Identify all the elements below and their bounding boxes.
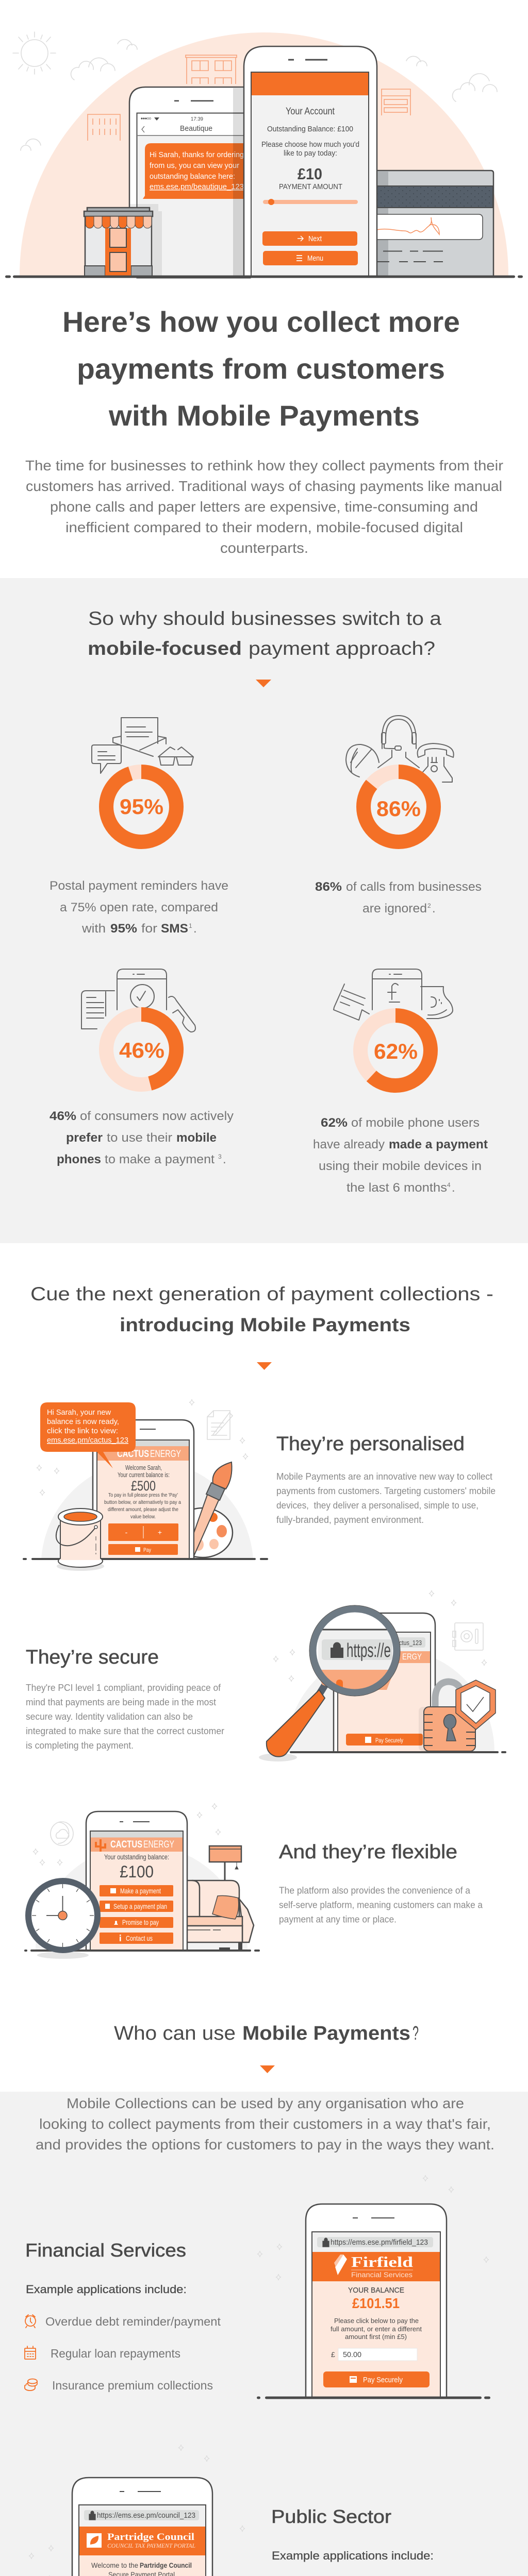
caption: 62%: 4 (447, 1181, 451, 1189)
phone: payment options (86, 1811, 187, 1951)
text: they're secure: integrated to make sure that the correct customer (26, 1725, 224, 1736)
heading: why switch: So why should businesses switch to a (88, 608, 441, 629)
donut: 46%: 46% (119, 1038, 164, 1062)
caption: 86%: 86% (315, 880, 342, 894)
caption: 62%: 62% (321, 1116, 348, 1130)
caption: 62%: made a payment (389, 1138, 488, 1151)
text: they're personalised (276, 1433, 496, 1525)
SMS phone (129, 87, 251, 278)
donut: 62%: 62% (374, 1039, 418, 1063)
caption: 46%: 3 (218, 1153, 222, 1160)
phone: secure payment: Pay Securely (375, 1737, 403, 1744)
caption: 46%: phones (57, 1153, 101, 1166)
payment phone: Please choose how much you'd (261, 140, 359, 149)
caption: 46%: to use their (107, 1131, 172, 1145)
illustration: secure (259, 1590, 506, 1761)
phone: partridge council: COUNCIL TAX PAYMENT PORTAL (107, 2542, 195, 2549)
phone: cactus balance: different amount, please adjust the (108, 1506, 178, 1513)
caption: 95%: with (81, 922, 106, 936)
arrow (257, 1362, 272, 1370)
phone: cactus balance: - (125, 1528, 128, 1536)
phone: cactus balance: Welcome Sarah, (125, 1464, 162, 1471)
padlock and shield (419, 1680, 496, 1751)
arrow (256, 680, 271, 687)
text: they're secure: They're PCI level 1 compliant, providing peace of (26, 1682, 221, 1693)
intro paragraph: phone calls and paper letters are expensive, time-consuming and (50, 499, 478, 515)
donut: 62% (360, 1015, 431, 1086)
donut: 86% (364, 772, 434, 842)
phone: firfield: £ (331, 2350, 335, 2359)
donut: 86%: 86% (376, 796, 421, 821)
icon: calendar (25, 2346, 36, 2359)
icon: phone, receipt and banknote (334, 969, 453, 1020)
caption: 46%: mobile (176, 1131, 217, 1145)
stat: 95% (50, 718, 228, 936)
bank card (371, 171, 493, 276)
phone: partridge council: Partridge Council (140, 2561, 192, 2569)
icon: letter, chat and glasses (92, 718, 193, 773)
text: they're secure: is completing the payment. (26, 1740, 134, 1751)
caption: 62%: . (452, 1181, 455, 1195)
phone: firfield: YOUR BALANCE (348, 2286, 404, 2295)
caption: 86%: 2 (427, 902, 431, 909)
phone: firfield: https://ems.ese.pm/firfield_123 (331, 2238, 428, 2247)
donut: 95%: 95% (120, 794, 163, 819)
phone: cactus balance: Pay (143, 1547, 151, 1553)
caption: 86%: are ignored (362, 902, 427, 916)
heading: who can use: ? (412, 2023, 419, 2044)
caption: 95%: 1 (189, 922, 192, 929)
SMS phone: Beautique (180, 124, 212, 133)
clouds (21, 40, 497, 150)
icon: moon and cloud (51, 1822, 73, 1845)
text: they're flexible: And they’re flexible (279, 1841, 457, 1863)
public sector text: Public Sector (271, 2506, 391, 2527)
financial services text: Financial Services (25, 2240, 186, 2261)
SMS bubble (143, 143, 248, 199)
stat: 86% (315, 716, 482, 916)
intro paragraph: inefficient compared to their modern, mobile-focused digital (65, 519, 463, 535)
heading: why switch: mobile-focused (88, 638, 242, 659)
phone: secure payment (334, 1613, 435, 1752)
payment phone: like to pay today: (284, 149, 337, 158)
heading: who can use: Who can use (114, 2023, 236, 2044)
panel: who can use (0, 2092, 528, 2576)
stat: 46% (50, 969, 234, 1166)
sofa (183, 1880, 254, 1951)
phone: partridge council (72, 2478, 212, 2576)
icon: alarm clock (25, 2315, 36, 2328)
text: they're flexible (279, 1841, 483, 1925)
hero ground line (5, 275, 523, 278)
payment phone: Your Account (286, 106, 335, 117)
phone: firfield: Pay Securely (363, 2376, 403, 2384)
financial services text: Overdue debt reminder/payment (45, 2315, 221, 2328)
paint can (56, 1509, 104, 1571)
phone: payment options: Contact us (126, 1934, 153, 1942)
heading: next generation: Cue the next generation of payment collections - (30, 1283, 493, 1304)
text: they're flexible: self-serve platform, meaning customers can make a (279, 1899, 483, 1910)
phone: payment options: Your outstanding balance: (104, 1853, 169, 1861)
phone: firfield: Please click below to pay the (334, 2317, 419, 2325)
payment phone: Outstanding Balance: £100 (267, 125, 353, 133)
phone: payment options: ENERGY (143, 1839, 174, 1850)
panel: why switch (0, 578, 528, 1243)
phone: firfield: £101.51 (352, 2295, 400, 2311)
intro text: Mobile Collections can be used by any organisation who are (67, 2095, 464, 2111)
caption: 62%: of mobile phone users (351, 1116, 480, 1130)
icon: coins (25, 2379, 37, 2391)
clock (28, 1881, 97, 1959)
background buildings (88, 55, 410, 141)
caption: 46%: . (223, 1153, 226, 1166)
phone: partridge council: https://ems.ese.pm/council_123 (97, 2511, 195, 2520)
title: payments from customers (77, 352, 445, 385)
text: they're secure: mind that payments are being made in the most (26, 1697, 216, 1707)
financial services text (25, 2240, 221, 2392)
arrow (260, 2065, 275, 2073)
floor lamp (209, 1846, 241, 1882)
caption: 62%: have already (313, 1138, 385, 1151)
phone: cactus balance: To pay in full please press the 'Pay' (108, 1492, 178, 1498)
caption: 95%: SMS (161, 922, 188, 936)
financial services text: Example applications include: (26, 2283, 187, 2296)
SMS phone: 17:39 (191, 116, 203, 122)
phone: payment options: Make a payment (120, 1887, 161, 1895)
phone: cactus balance: £500 (131, 1478, 156, 1494)
payment phone (244, 46, 377, 277)
text: they're personalised: Mobile Payments are an innovative new way to collect (276, 1471, 492, 1482)
text: they're secure: They’re secure (26, 1647, 159, 1668)
caption: 46%: prefer (66, 1131, 103, 1145)
heading: next generation: introducing Mobile Payments (120, 1314, 410, 1335)
phone: partridge council: Welcome to the (91, 2561, 138, 2569)
text: they're personalised: They’re personalised (276, 1433, 465, 1455)
heading: next generation (30, 1283, 493, 1335)
icon: headset agent, satellite dish and telephone (346, 716, 454, 783)
caption: 86% (315, 880, 482, 916)
caption: 95% (50, 879, 228, 936)
donut: 46% (106, 1014, 176, 1084)
payment phone: £10 (298, 165, 322, 183)
SMS bubble: Hi Sarah, thanks for ordering (150, 150, 244, 159)
payment phone: Next (308, 234, 322, 243)
phone: firfield: full amount, or enter a different (331, 2325, 422, 2333)
phone: payment options: CACTUS (110, 1839, 142, 1850)
caption: 46% (50, 1109, 234, 1166)
speech bubble: balance is now ready, (47, 1417, 119, 1426)
phone: secure payment: ctus_123 (399, 1639, 422, 1647)
phone: partridge council: Partridge Council (107, 2532, 194, 2543)
caption: 62% (313, 1116, 488, 1195)
phone: payment options: Promise to pay (122, 1918, 159, 1926)
title: with Mobile Payments (108, 399, 420, 432)
intro paragraph: The time for businesses to rethink how they collect payments from their (25, 457, 503, 473)
public sector text: Example applications include: (272, 2549, 434, 2562)
caption: 95%: for (141, 922, 157, 936)
phone: cactus balance: ENERGY (150, 1449, 181, 1460)
ground line (24, 1950, 260, 1952)
speech bubble: Hi Sarah, your new (47, 1408, 111, 1417)
SMS bubble: outstanding balance here: (150, 172, 235, 181)
phone: firfield: amount first (min £5) (345, 2333, 407, 2341)
phone: firfield: 50.00 (343, 2350, 361, 2359)
icon: safe (453, 1623, 483, 1650)
ground line (290, 1751, 506, 1753)
donut: 95% (106, 772, 176, 842)
payment phone: Menu (307, 254, 323, 263)
title (62, 306, 460, 432)
caption: 86%: . (432, 902, 436, 916)
financial services text: Insurance premium collections (52, 2379, 213, 2392)
SMS bubble: ems.ese.pm/beautique_123 (150, 182, 244, 191)
text: they're flexible: The platform also provides the convenience of a (279, 1885, 471, 1896)
illustration: personalised (23, 1399, 268, 1571)
phone: cactus balance: value below. (130, 1514, 156, 1520)
caption: 95%: Postal payment reminders have (50, 879, 228, 893)
speech bubble: ems.ese.pm/cactus_123 (47, 1436, 128, 1445)
shop front (84, 208, 153, 277)
illustration: flexible (24, 1803, 260, 1959)
text: they're secure: secure way. Identity validation can also be (26, 1711, 193, 1722)
palette (173, 1508, 233, 1557)
phone: cactus balance: + (158, 1528, 162, 1536)
paint brush (194, 1462, 232, 1556)
icon: phone, document and receiver (81, 969, 195, 1032)
heading: who can use: Mobile Payments (242, 2023, 410, 2044)
caption: 86%: of calls from businesses (346, 880, 482, 894)
heading: why switch: payment approach? (249, 638, 435, 659)
caption: 46%: of consumers now actively (80, 1109, 234, 1123)
phone: payment options: Setup a payment plan (113, 1902, 167, 1910)
speech bubble: click the link to view: (47, 1427, 118, 1435)
phone: cactus balance (93, 1420, 194, 1559)
phone: cactus balance: Your current balance is: (118, 1471, 170, 1479)
payment phone: PAYMENT AMOUNT (279, 183, 342, 191)
SMS bubble: from us, you can view your (150, 161, 239, 170)
intro text: looking to collect payments from their customers in a way that's fair, (39, 2116, 491, 2132)
caption: 62%: the last 6 months (346, 1181, 447, 1195)
ground line (23, 1558, 268, 1560)
hero illustration (5, 32, 523, 278)
stat: 62% (313, 969, 488, 1195)
intro text: and provides the options for customers to pay in the ways they want. (36, 2137, 494, 2153)
intro paragraph (25, 457, 503, 556)
phone: firfield (306, 2204, 447, 2398)
magnifying glass (259, 1605, 400, 1761)
phone: secure payment: ERGY (402, 1652, 422, 1662)
intro paragraph: customers has arrived. Traditional ways of chasing payments like manual (26, 478, 502, 494)
icon: sun (13, 32, 56, 74)
caption: 46%: 46% (50, 1109, 76, 1123)
intro paragraph: counterparts. (220, 540, 308, 556)
text: they're personalised: fully-branded, payment environment. (276, 1514, 424, 1525)
title: Here’s how you collect more (62, 306, 460, 338)
magnifying glass: https://e (346, 1640, 391, 1662)
hero dome backdrop (20, 32, 508, 276)
public sector text (271, 2506, 504, 2576)
caption: 46%: to make a payment (105, 1153, 214, 1166)
caption: 62%: using their mobile devices in (319, 1159, 482, 1173)
heading: why switch (88, 608, 441, 659)
ground line (257, 2397, 490, 2399)
phone: payment options: £100 (120, 1862, 154, 1881)
text: they're personalised: devices, they deliver a personalised, simple to use, (276, 1500, 478, 1511)
text: they're flexible: payment at any time or place. (279, 1913, 397, 1925)
text: they're personalised: payments from customers. Targeting customers' mobile (276, 1485, 496, 1496)
phone: firfield: Financial Services (351, 2271, 412, 2279)
financial services text: Regular loan repayments (51, 2347, 180, 2360)
heading: who can use (114, 2023, 419, 2044)
caption: 95%: 95% (110, 922, 137, 936)
icon: notepad and pen (207, 1411, 233, 1439)
phone: cactus balance: CACTUS (117, 1449, 149, 1460)
caption: 95%: . (193, 922, 197, 936)
text: they're secure (26, 1647, 224, 1751)
intro text (36, 2095, 494, 2153)
speech bubble (40, 1402, 136, 1468)
caption: 95%: a 75% open rate, compared (60, 901, 218, 914)
phone: firfield: Firfield (351, 2254, 413, 2270)
phone: cactus balance: button below, or alternatively to pay a (104, 1499, 181, 1505)
